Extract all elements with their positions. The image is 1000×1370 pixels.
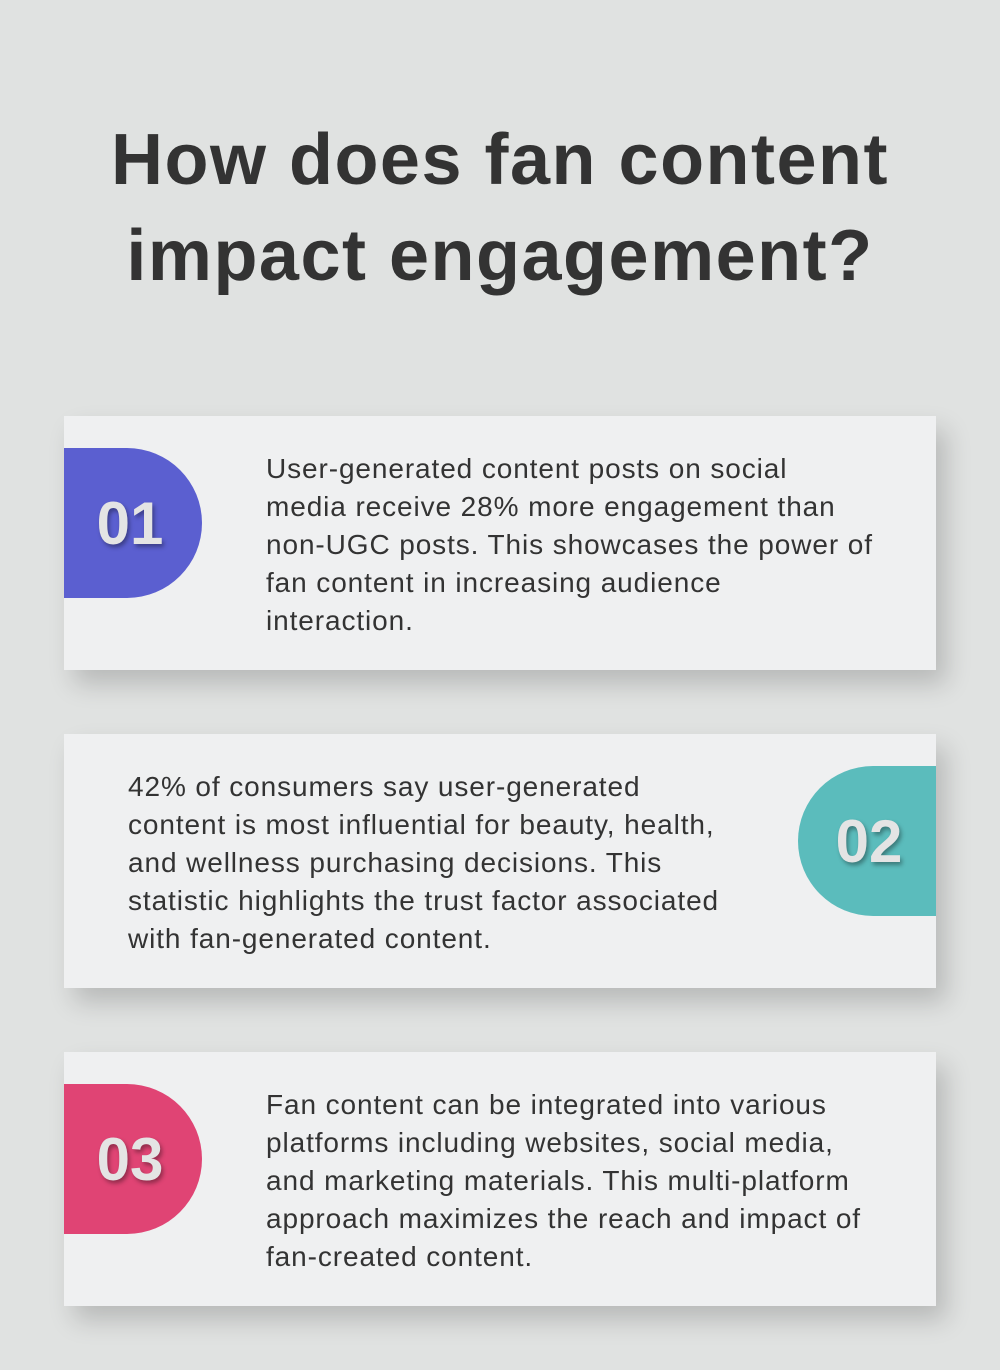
badge 02 — [798, 766, 936, 916]
title — [111, 120, 889, 296]
text 1: media receive 28% more engagement than — [266, 491, 836, 522]
text 3: platforms including websites, social media, — [266, 1127, 834, 1158]
panel: card 2 — [64, 734, 936, 988]
text 1: User-generated content posts on social — [266, 453, 787, 484]
text 2: statistic highlights the trust factor associated — [128, 885, 719, 916]
text 3: Fan content can be integrated into various — [266, 1089, 827, 1120]
panel: card 1 — [64, 416, 936, 670]
badge 03: 03 — [97, 1126, 163, 1192]
text 2: with fan-generated content. — [128, 923, 492, 954]
badge 02: 02 — [836, 808, 902, 874]
text 3: approach maximizes the reach and impact of — [266, 1203, 861, 1234]
title: How does fan content — [111, 120, 889, 200]
badge 01: 01 — [97, 490, 163, 556]
text 1: interaction. — [266, 605, 414, 636]
panel: card 3 — [64, 1052, 936, 1306]
text 2 — [128, 771, 719, 954]
text 3 — [266, 1089, 861, 1272]
text 1 — [266, 453, 873, 636]
text 1: non-UGC posts. This showcases the power of — [266, 529, 873, 560]
text 3: and marketing materials. This multi-platform — [266, 1165, 850, 1196]
text 2: and wellness purchasing decisions. This — [128, 847, 662, 878]
title: impact engagement? — [126, 216, 874, 296]
text 3: fan-created content. — [266, 1241, 533, 1272]
text 2: 42% of consumers say user-generated — [128, 771, 640, 802]
badge 03 — [64, 1084, 202, 1234]
badge 01 — [64, 448, 202, 598]
text 2: content is most influential for beauty, health, — [128, 809, 715, 840]
text 1: fan content in increasing audience — [266, 567, 722, 598]
